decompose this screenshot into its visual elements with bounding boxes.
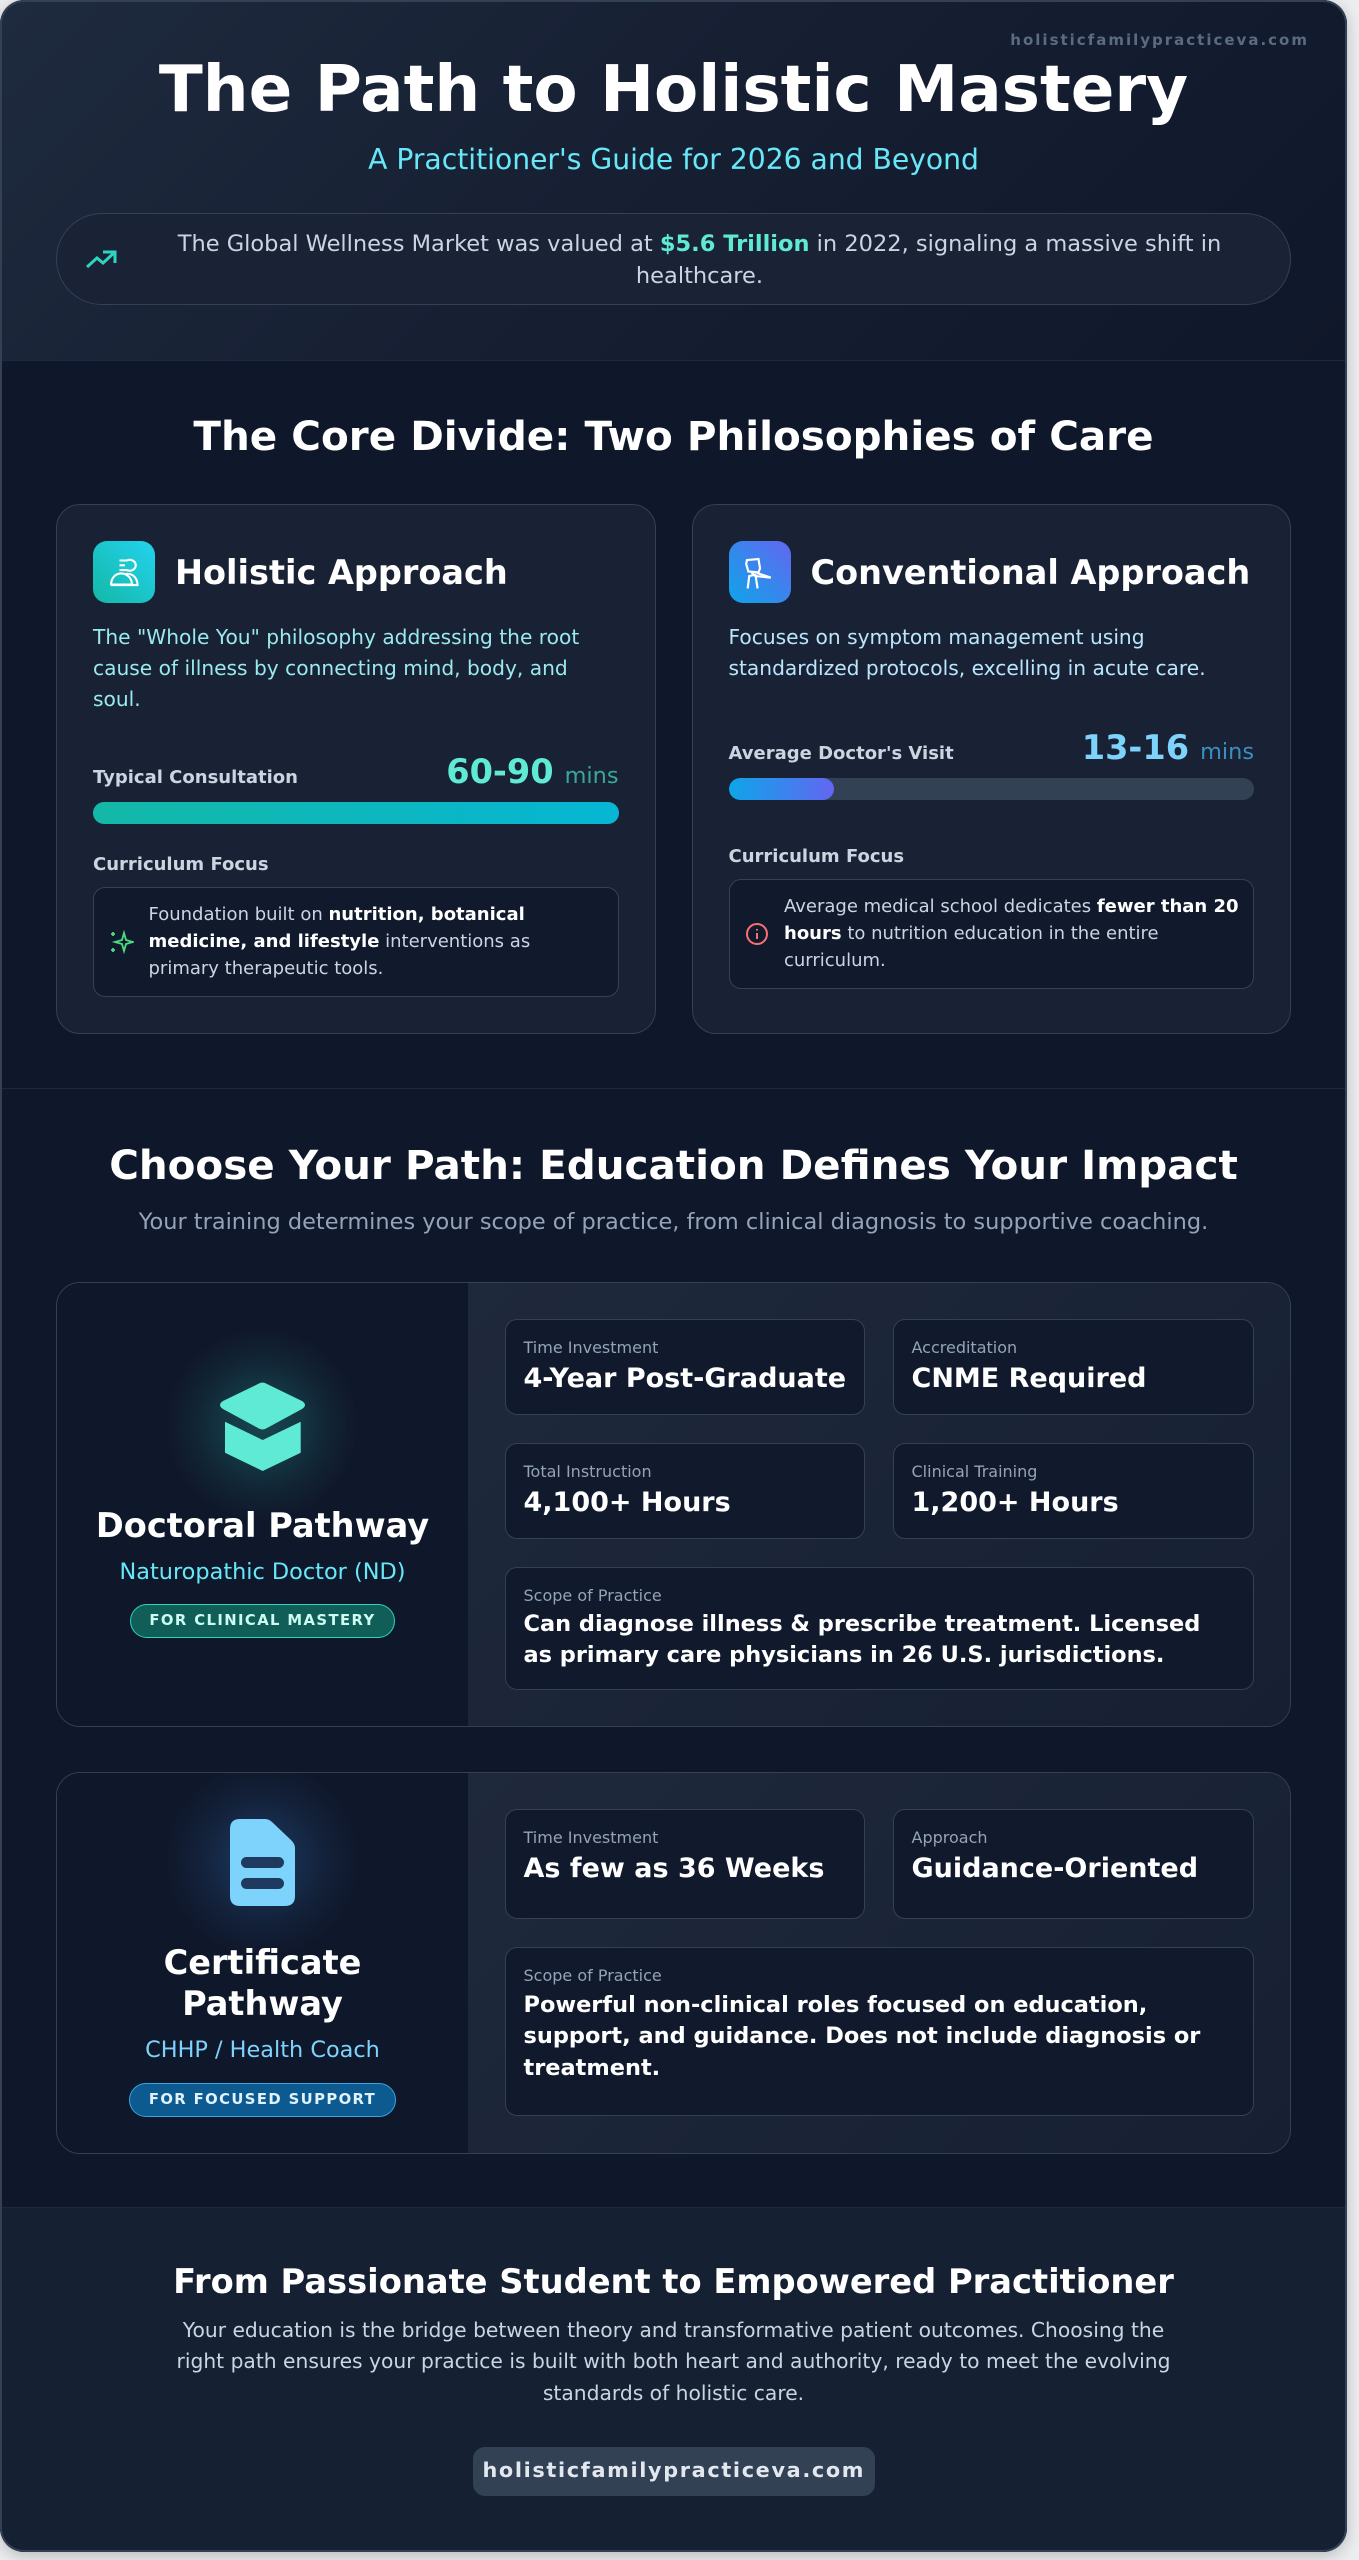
curriculum text: primary therapeutic tools. [148,958,383,978]
callout text: healthcare. [636,263,763,289]
stat: doctor visit [728,728,1254,767]
callout text: The Global Wellness Market was valued at $5.6 Trillion in 2022, signaling a massive shift in [178,231,1221,257]
description [92,624,579,710]
market stat callout [56,213,1291,305]
footer section [0,2207,1347,2552]
icon: holistic people [93,541,155,603]
subheading: degree: Naturopathic Doctor (ND) [120,1559,405,1585]
description: standardized protocols, excelling in acute care. [728,656,1206,680]
heading: certificate pathway: Certificate [164,1943,361,1982]
panel: certificate pathway [56,1772,1291,2154]
curriculum text: medicine, and lifestyle interventions as [148,930,530,952]
badge: clinical mastery: FOR CLINICAL MASTERY [149,1612,376,1629]
section subtitle: Your training determines your scope of practice, from clinical diagnosis to supportive coaching. [139,1208,1208,1234]
stat: scope of practice: Scope of Practice [524,1966,662,1985]
heading: doctoral pathway: Doctoral Pathway [96,1506,429,1545]
stat: clinical training [893,1443,1254,1539]
stat: total instruction: 4,100+ Hours [524,1487,731,1518]
title: The Path to Holistic Mastery [159,52,1188,127]
description: soul. [93,686,141,710]
heading: choose your path: Choose Your Path: Education Defines Your Impact [109,1140,1238,1188]
curriculum text: Average medical school dedicates fewer than 20 [784,896,1239,916]
footer text: Your education is the bridge between theory and transformative patient outcomes. Choosing the [183,2318,1164,2342]
heading: certificate pathway [164,1943,361,2023]
stat: typical consultation: 60-90 mins [446,752,618,791]
bar: visit length [728,778,1254,800]
curriculum text [148,904,530,978]
footer heading: From Passionate Student to Empowered Practitioner [173,2262,1174,2301]
icon: conventional figure [728,541,790,603]
icon: info alert [746,923,768,945]
description: Focuses on symptom management using [728,624,1145,648]
badge: focused support: FOR FOCUSED SUPPORT [149,2091,376,2108]
header section [0,0,1347,360]
label: curriculum focus: Curriculum Focus [93,854,269,874]
callout: curriculum [728,879,1254,989]
label: curriculum focus: Curriculum Focus [728,846,904,866]
details: certificate [468,1773,1290,2153]
stat: clinical training: Clinical Training [912,1462,1037,1481]
heading: holistic approach: Holistic Approach [175,553,508,592]
icon: sparkle [111,930,134,954]
stat: total instruction [505,1443,865,1539]
panel: holistic approach [56,504,656,1034]
stat: typical consultation [93,752,618,791]
description: cause of illness by connecting mind, body, and [93,656,568,680]
section: choose your path [0,1088,1347,2207]
panel: conventional approach [692,504,1291,1034]
icon: cap box [220,1382,305,1471]
stat: total instruction: Total Instruction [524,1462,652,1481]
icon: trending up [86,250,116,268]
footer text: standards of holistic care. [543,2380,804,2404]
stat: doctor visit: 13-16 mins [1082,728,1254,767]
stat: time investment: 4-Year Post-Graduate [524,1363,846,1394]
callout: curriculum [93,887,618,997]
stat: approach [893,1809,1254,1919]
description: The "Whole You" philosophy addressing the root [93,624,579,648]
curriculum text [784,896,1239,970]
icon glow [152,1315,372,1535]
badge: clinical mastery [130,1604,395,1638]
stat: clinical training: 1,200+ Hours [912,1487,1119,1518]
subheading: credential: CHHP / Health Coach [145,2037,380,2063]
badge: focused support [129,2083,396,2117]
icon: document [230,1819,295,1906]
bar: consultation length [93,802,618,824]
stat: scope of practice: Scope of Practice [524,1586,662,1605]
section: core divide [0,360,1347,1088]
stat: time investment: Time Investment [524,1338,658,1357]
stat: approach: Guidance-Oriented [912,1853,1198,1884]
stat: approach: Approach [912,1828,988,1847]
sidebar: doctoral [57,1283,468,1726]
stat: scope of practice [505,1567,1254,1690]
heading: conventional approach: Conventional Approach [810,553,1250,592]
stat: scope of practice: treatment. [524,2055,660,2081]
watermark url: holisticfamilypracticeva.com [1010,31,1309,49]
heading: certificate pathway: Pathway [182,1984,343,2023]
stat: time investment: Time Investment [524,1828,658,1847]
footer url button [473,2447,875,2496]
stat: scope of practice: Powerful non-clinical roles focused on education, [524,1992,1147,2018]
stat: scope of practice: as primary care physicians in 26 U.S. jurisdictions. [524,1642,1164,1668]
stat: time investment [505,1319,865,1415]
footer text [177,2318,1170,2404]
stat: typical consultation: Typical Consultation [93,767,298,788]
stat: accreditation: CNME Required [912,1363,1146,1394]
stat: accreditation: Accreditation [912,1338,1017,1357]
stat: scope of practice: Can diagnose illness & prescribe treatment. Licensed [524,1611,1200,1637]
curriculum text: hours to nutrition education in the entire [784,922,1159,944]
stat: doctor visit: Average Doctor's Visit [728,743,954,764]
heading: core divide: The Core Divide: Two Philosophies of Care [193,412,1154,460]
panel: doctoral pathway [56,1282,1291,1727]
footer url button: holisticfamilypracticeva.com [482,2458,865,2482]
stat: time investment [505,1809,865,1919]
stat: scope of practice [505,1947,1254,2116]
curriculum text: Foundation built on nutrition, botanical [148,904,525,924]
stat: accreditation [893,1319,1254,1415]
subtitle: A Practitioner's Guide for 2026 and Beyond [368,143,979,176]
curriculum text: curriculum. [784,950,886,970]
stat: scope of practice: support, and guidance. Does not include diagnosis or [524,2023,1200,2049]
stat: time investment: As few as 36 Weeks [524,1853,824,1884]
details: doctoral [468,1283,1290,1726]
footer text: right path ensures your practice is built with both heart and authority, ready to meet the evolving [177,2349,1170,2373]
description [728,624,1206,680]
icon glow [152,1750,372,1970]
sidebar: certificate [57,1773,468,2153]
callout text [178,231,1221,289]
